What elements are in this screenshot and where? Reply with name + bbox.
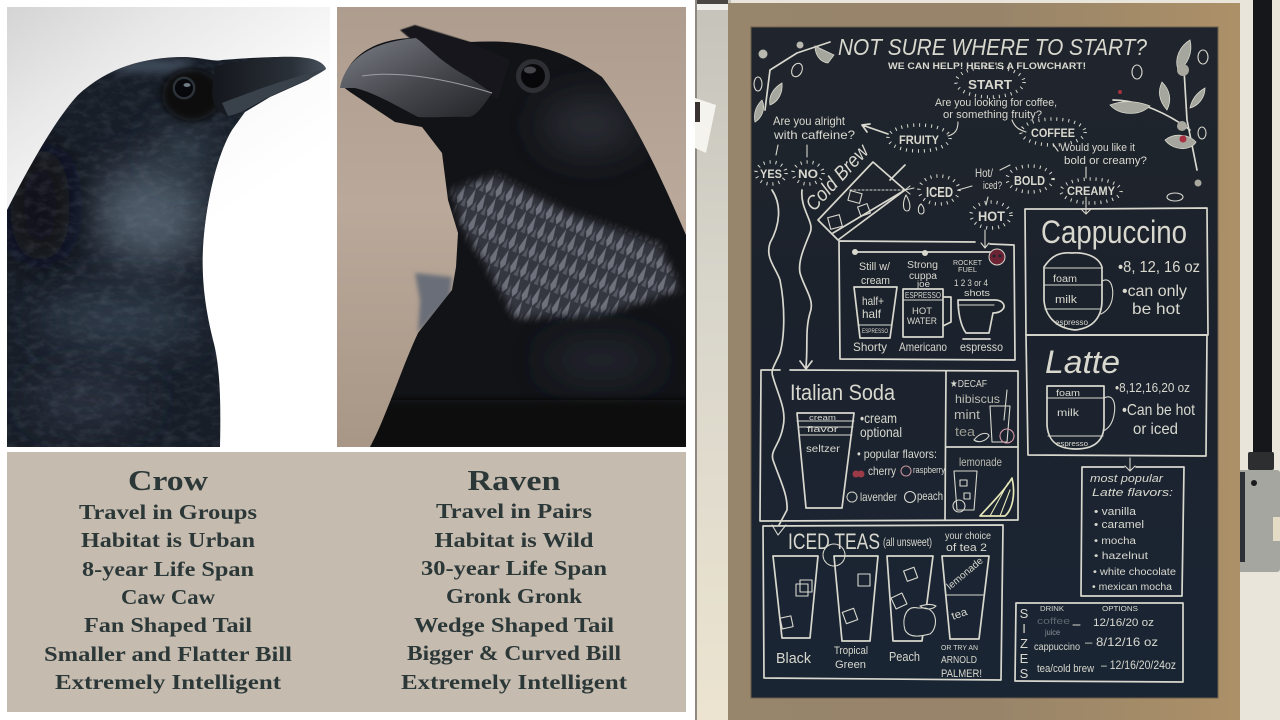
- column: espresso: espresso: [960, 340, 1003, 354]
- panel: sizes: OPTIONS: [1102, 604, 1138, 613]
- section: decaf tea: [950, 379, 1014, 443]
- panel: cappuccino: Cappuccino: [1041, 214, 1187, 250]
- panel: sizes: I: [1022, 621, 1026, 636]
- question: hot or iced: Hot/: [975, 166, 994, 180]
- coffee branch left: [754, 42, 834, 122]
- panel: hot drinks: [839, 241, 1015, 360]
- column: crow: Travel in Groups: [79, 500, 257, 524]
- flow node: iced: ICED: [926, 184, 953, 201]
- question: bold or creamy: bold or creamy?: [1064, 155, 1147, 167]
- question: caffeine: with caffeine?: [773, 128, 855, 142]
- panel: sizes: – 8/12/16 oz: [1085, 635, 1158, 649]
- drink: black tea: Black: [776, 650, 811, 667]
- flow node: yes: YES: [760, 167, 782, 181]
- drink: tropical green tea: Tropical: [834, 645, 868, 657]
- panel: popular latte flavors: [1081, 458, 1184, 596]
- photo: crow: [0, 7, 330, 450]
- column: espresso: shots: [964, 288, 991, 298]
- column: americano: Americano: [899, 340, 947, 354]
- panel: latte: Latte: [1045, 344, 1120, 380]
- flowchart heading: WE CAN HELP! HERE'S A FLOWCHART!: [888, 61, 1086, 72]
- panel: latte: or iced: [1133, 421, 1178, 438]
- section: decaf tea: tea: [955, 424, 976, 439]
- panel: popular latte flavors: • hazelnut: [1094, 551, 1148, 562]
- column: shorty: half+: [862, 294, 884, 308]
- panel: italian soda: •cream: [860, 410, 897, 426]
- panel: sizes: – 12/16/20/24oz: [1101, 658, 1176, 672]
- drink: peach tea: Peach: [889, 649, 920, 664]
- panel: popular latte flavors: Latte flavors:: [1092, 487, 1173, 499]
- column: crow: Extremely Intelligent: [55, 670, 282, 694]
- panel: iced teas: your choice: [945, 531, 991, 542]
- panel: sizes: juice: [1044, 628, 1061, 637]
- icon: skull: [989, 249, 1005, 265]
- panel: popular latte flavors: • caramel: [1094, 519, 1144, 531]
- section: decaf tea: mint: [954, 407, 980, 422]
- column: raven: Habitat is Wild: [434, 528, 594, 552]
- icon: citrus slice: [823, 544, 845, 566]
- section: decaf tea: ★DECAF: [950, 379, 987, 390]
- flow node: iced: [919, 176, 959, 204]
- flow node: coffee: [1021, 119, 1085, 145]
- section: decaf tea: hibiscus: [955, 392, 1000, 406]
- electrical box: [1235, 470, 1280, 572]
- question: hot or iced: iced?: [983, 180, 1002, 192]
- arrow: fruity to caffeine: [862, 124, 888, 134]
- column: espresso: [953, 258, 1004, 354]
- question: bold or creamy: Would you like it: [1060, 142, 1135, 154]
- flow node: bold: [1007, 166, 1053, 192]
- panel: popular latte flavors: • mocha: [1094, 536, 1137, 547]
- panel: sizes: tea/cold brew: [1037, 663, 1094, 675]
- drink: arnold palmer: OR TRY AN: [941, 643, 978, 652]
- column: raven: Travel in Pairs: [436, 499, 592, 523]
- raven neck feathers: [448, 171, 683, 323]
- flowchart heading: NOT SURE WHERE TO START?: [838, 34, 1147, 60]
- column: crow: Caw Caw: [121, 585, 215, 609]
- flow node: bold: BOLD: [1014, 173, 1045, 188]
- crow plumage texture: [7, 50, 247, 450]
- panel: latte: [1026, 335, 1207, 456]
- icon: cappuccino cup: foam: [1053, 274, 1077, 285]
- question: caffeine: Are you alright: [773, 114, 846, 128]
- flow node: creamy: CREAMY: [1067, 186, 1115, 198]
- question: bold or creamy: [1060, 142, 1147, 167]
- column: shorty: ESPRESSO: [862, 329, 888, 335]
- question: coffee or fruity: or something fruity?: [943, 109, 1042, 121]
- panel: italian soda: Italian Soda: [790, 380, 896, 405]
- question: coffee or fruity: [935, 97, 1057, 121]
- question: hot or iced: [975, 166, 1002, 192]
- column: crow: Smaller and Flatter Bill: [44, 642, 292, 666]
- panel: popular latte flavors: most popular: [1090, 473, 1165, 485]
- icon: peach: [904, 492, 916, 502]
- flow node: coffee: COFFEE: [1031, 126, 1075, 140]
- panel: cappuccino: •8, 12, 16 oz: [1118, 259, 1200, 276]
- flow node: hot: HOT: [978, 208, 1005, 224]
- flow node: fruity: FRUITY: [899, 133, 939, 147]
- icon: latte cup: [1047, 386, 1115, 449]
- column: raven: Gronk Gronk: [446, 584, 582, 608]
- small bird shape behind raven: [415, 273, 452, 333]
- panel: italian soda: [760, 370, 1018, 521]
- icon: cappuccino cup: [1044, 253, 1113, 330]
- column: shorty: Shorty: [853, 340, 887, 354]
- panel: sizes: DRINK: [1040, 604, 1064, 613]
- column: raven: Extremely Intelligent: [401, 670, 628, 694]
- drink: arnold palmer: tea: [950, 606, 970, 623]
- panel: sizes: S: [1020, 666, 1029, 681]
- flow node: start: [956, 67, 1024, 97]
- paper tag on wall: [695, 98, 716, 153]
- flow node: creamy: [1061, 179, 1121, 203]
- drink: tropical green tea: Green: [835, 659, 866, 671]
- column: americano: HOT: [912, 306, 933, 316]
- column: raven: Bigger & Curved Bill: [407, 641, 621, 665]
- section: lemonade: lemonade: [959, 455, 1002, 469]
- panel: italian soda: peach: [917, 489, 943, 503]
- panel: cappuccino: •can only: [1122, 283, 1187, 300]
- chalkboard: [751, 27, 1218, 698]
- panel: italian soda: • popular flavors:: [857, 447, 937, 461]
- flow node: fruity: [888, 125, 950, 151]
- column: americano: joe: [916, 279, 930, 289]
- panel: sizes: Z: [1020, 636, 1028, 651]
- panel: italian soda: cherry: [868, 464, 896, 478]
- coffee branch right: [1110, 40, 1208, 201]
- column: crow: Crow: [128, 465, 208, 497]
- panel: cappuccino: be hot: [1132, 301, 1181, 318]
- panel: cappuccino: [1025, 208, 1208, 335]
- wavy line from yes: [769, 190, 787, 525]
- column: espresso: FUEL: [958, 265, 977, 274]
- panel: italian soda: raspberry: [913, 465, 945, 475]
- drink: peach tea: [887, 556, 936, 664]
- panel: popular latte flavors: • white chocolate: [1093, 567, 1176, 578]
- column: raven: Raven: [468, 465, 560, 497]
- column: crow: Fan Shaped Tail: [84, 613, 252, 637]
- column: raven: [401, 465, 628, 694]
- column: shorty: Still w/: [859, 261, 891, 273]
- flow node: hot: [971, 202, 1011, 228]
- section: lemonade: [953, 455, 1014, 516]
- panel: sizes: E: [1020, 651, 1029, 666]
- panel: italian soda: optional: [860, 424, 902, 440]
- connectors: [776, 120, 1086, 205]
- raven nasal bristles: [400, 24, 472, 42]
- drink: arnold palmer: ARNOLD: [941, 655, 977, 666]
- flow node: no: [793, 162, 823, 184]
- icon: latte cup: milk: [1057, 408, 1080, 419]
- illustration: cold brew glass: Cold Brew: [802, 139, 875, 215]
- column: americano: ESPRESSO: [905, 291, 941, 300]
- column: crow: [44, 465, 292, 694]
- column: raven: Wedge Shaped Tail: [414, 613, 614, 637]
- drink: arnold palmer: [941, 555, 989, 680]
- icon: lavender: [847, 492, 857, 502]
- icon: cherry: [852, 470, 864, 478]
- column: americano: cuppa: [909, 271, 937, 282]
- panel: latte: •Can be hot: [1122, 402, 1195, 419]
- text panel: comparison: [7, 452, 686, 712]
- flow node: no: NO: [798, 167, 818, 181]
- wavy line from no: [800, 190, 812, 369]
- panel: popular latte flavors: • vanilla: [1094, 506, 1137, 518]
- icon: latte cup: espresso: [1056, 441, 1088, 448]
- question: caffeine: [773, 114, 855, 142]
- icon: cappuccino cup: milk: [1055, 294, 1078, 306]
- column: americano: Strong: [907, 260, 938, 271]
- question: coffee or fruity: Are you looking for coffee,: [935, 97, 1057, 109]
- raven eye: [516, 59, 550, 93]
- panel: iced teas: of tea 2: [946, 542, 987, 554]
- column: espresso: ROCKET: [953, 258, 982, 267]
- illustration: cold brew glass: [802, 139, 924, 240]
- icon: raspberry: [901, 466, 911, 476]
- icon: soda glass: cream: [809, 415, 836, 422]
- column: shorty: [853, 261, 897, 354]
- panel: sizes: cappuccino: [1034, 642, 1080, 653]
- column: espresso: 1 2 3 or 4: [954, 278, 988, 288]
- column: crow: 8-year Life Span: [82, 557, 254, 581]
- drink: arnold palmer: lemonade: [945, 555, 986, 592]
- column: americano: [899, 260, 951, 354]
- column: shorty: half: [862, 307, 882, 321]
- panel: sizes: 12/16/20 oz: [1093, 617, 1154, 629]
- drink: black tea: [773, 556, 818, 667]
- column: shorty: cream: [861, 275, 890, 287]
- conduit connector: [1248, 452, 1274, 470]
- panel: popular latte flavors: • mexican mocha: [1092, 582, 1172, 593]
- flowchart heading: [838, 34, 1147, 72]
- icon: latte cup: foam: [1056, 388, 1080, 398]
- panel: sizes: S: [1020, 606, 1029, 621]
- flow node: start: START: [968, 77, 1012, 92]
- panel: latte: •8,12,16,20 oz: [1115, 380, 1190, 395]
- arrows down to boxes: [905, 186, 1091, 248]
- flow node: yes: [756, 162, 786, 184]
- panel: sizes: [1015, 603, 1183, 682]
- icon: soda glass: flavor: [807, 425, 839, 434]
- panel: sizes: coffee: [1037, 616, 1070, 626]
- column: raven: 30-year Life Span: [421, 556, 607, 580]
- panel: iced teas: (all unsweet): [883, 535, 932, 549]
- icon: soda glass: seltzer: [806, 444, 841, 455]
- raven beak: [340, 38, 492, 117]
- column: crow: Habitat is Urban: [81, 528, 255, 552]
- drink: arnold palmer: PALMER!: [941, 668, 982, 680]
- panel: iced teas: [763, 525, 1003, 680]
- panel: italian soda: lavender: [860, 490, 897, 504]
- column: americano: WATER: [907, 316, 937, 326]
- icon: soda glass: [797, 413, 854, 508]
- icon: cappuccino cup: espresso: [1055, 318, 1089, 327]
- wall background: [695, 0, 1280, 720]
- crow eye: [172, 76, 196, 100]
- conduit pipe: [1253, 0, 1272, 455]
- drink: tropical green tea: [834, 556, 878, 671]
- panel: iced teas: ICED TEAS: [788, 529, 880, 554]
- crow beak: [212, 57, 326, 116]
- photo: raven: [330, 7, 690, 450]
- wooden frame: [728, 3, 1240, 720]
